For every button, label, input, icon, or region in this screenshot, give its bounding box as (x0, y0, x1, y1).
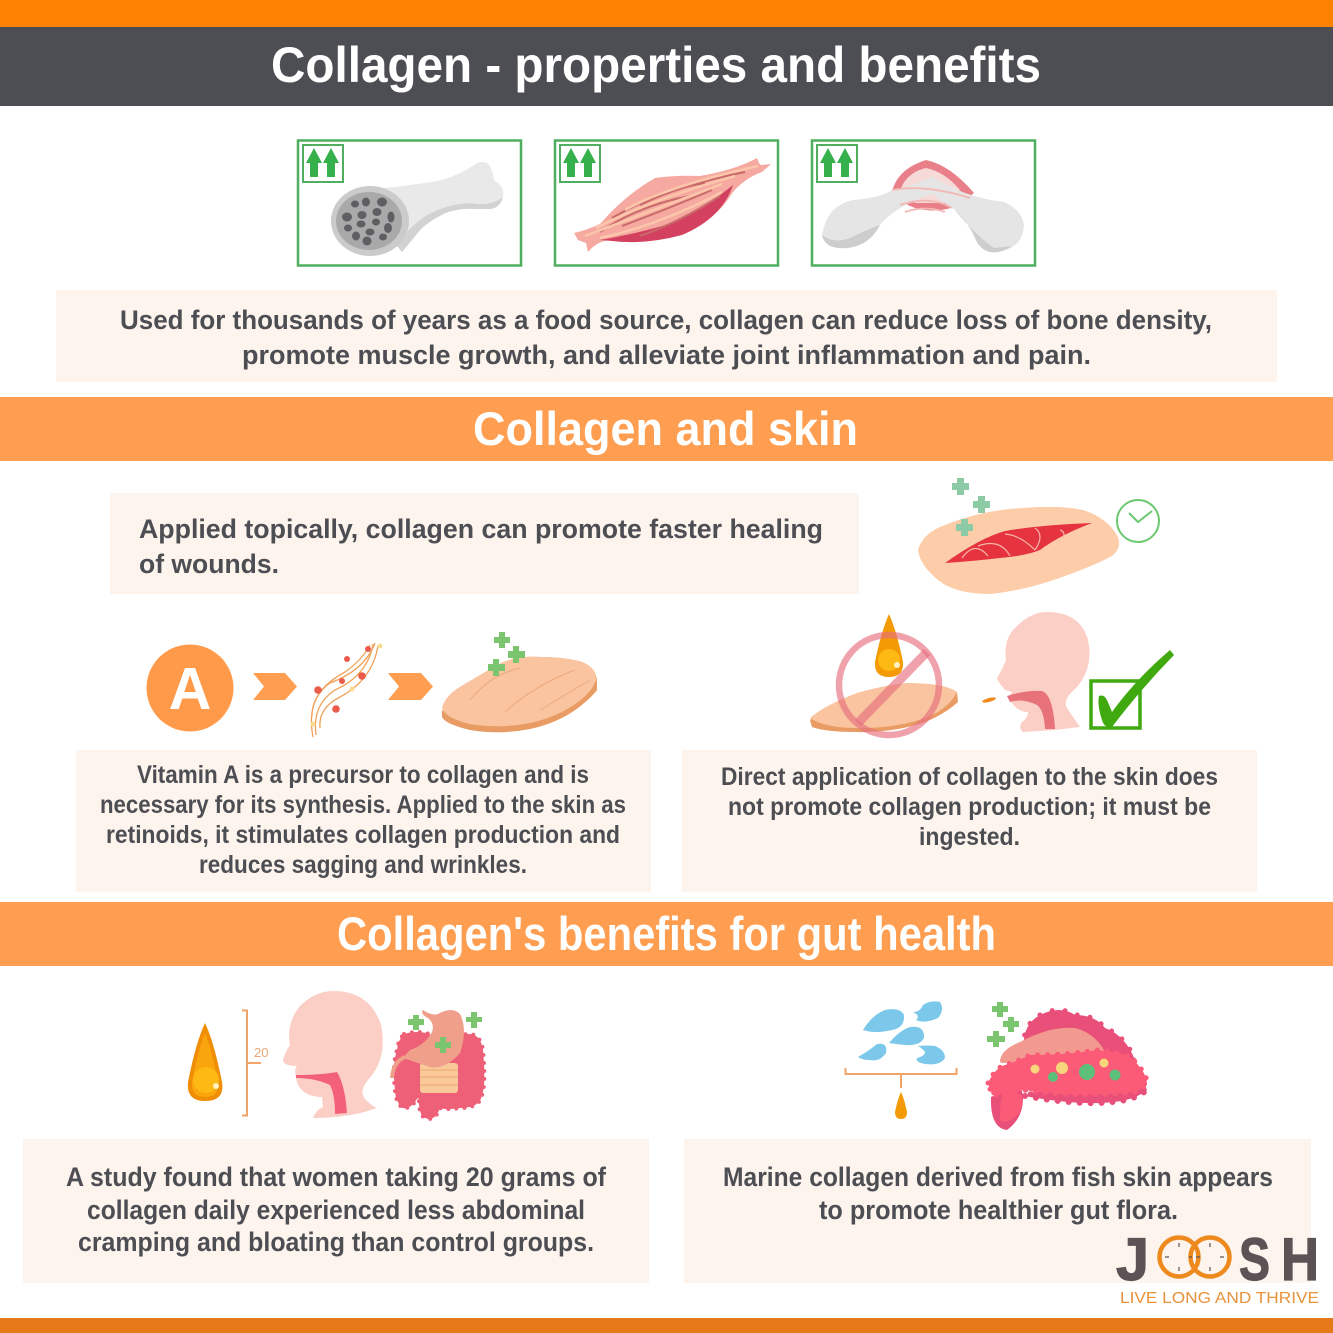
icon: 20 gram collagen drop: 20 (254, 1045, 268, 1060)
panel: intro text (56, 290, 1277, 382)
logo: JOOSH: LIVE LONG AND THRIVE (1120, 1290, 1319, 1307)
panel: direct application text: ingested. (919, 823, 1020, 851)
title banner: Collagen - properties and benefits (271, 37, 1041, 93)
icon: vitamin A circle (146, 644, 234, 732)
panel: wound healing text (110, 493, 859, 594)
logo: JOOSH: S (1239, 1226, 1270, 1293)
panel: joint icon (812, 140, 1035, 266)
icon: head ingesting collagen with check (982, 612, 1174, 732)
panel: vitamin A text: necessary for its synthesis. Applied to the skin as (100, 791, 626, 819)
heading: collagen and skin (0, 397, 1333, 461)
icon: fish skin to collagen (846, 1001, 956, 1119)
icon: wound with healing clock (918, 478, 1159, 594)
panel: direct application text (682, 750, 1257, 892)
panel: marine collagen text (684, 1139, 1311, 1283)
logo: JOOSH: H (1281, 1226, 1319, 1293)
panel: direct application text: Direct application of collagen to the skin does (721, 763, 1218, 791)
icon: 20 gram collagen drop (188, 1010, 268, 1116)
icon: topical drop prohibited (810, 614, 958, 735)
panel: study text: collagen daily experienced less abdominal (87, 1195, 585, 1225)
panel: intro text: Used for thousands of years as a food source, collagen can reduce loss of bone density, (120, 305, 1212, 335)
panel: vitamin A text: retinoids, it stimulates collagen production and (106, 821, 620, 849)
panel: vitamin A text (76, 750, 651, 892)
heading: collagen and skin: Collagen and skin (473, 402, 858, 455)
panel: intro text: promote muscle growth, and alleviate joint inflammation and pain. (242, 340, 1091, 370)
icon: head ingesting (283, 991, 383, 1118)
top orange bar (0, 0, 1333, 27)
panel: marine collagen text: to promote healthier gut flora. (819, 1195, 1178, 1225)
icon: digestive system (392, 1010, 484, 1119)
bottom orange bar (0, 1318, 1333, 1333)
heading: gut health: Collagen's benefits for gut health (337, 907, 996, 960)
panel: study text: cramping and bloating than control groups. (78, 1227, 594, 1257)
logo: JOOSH: J (1116, 1226, 1149, 1293)
icon: healthy gut flora (987, 1002, 1147, 1130)
icon: collagen fibres (310, 643, 382, 737)
panel: wound healing text: Applied topically, collagen can promote faster healing (139, 514, 823, 544)
panel: marine collagen text: Marine collagen derived from fish skin appears (723, 1162, 1273, 1192)
panel: muscle growth icon (555, 140, 778, 266)
panel: vitamin A text: Vitamin A is a precursor to collagen and is (137, 761, 589, 789)
logo: JOOSH (1116, 1226, 1319, 1307)
panel: bone density icon (298, 140, 521, 266)
panel: study text (23, 1139, 649, 1283)
panel: vitamin A text: reduces sagging and wrinkles. (199, 851, 527, 879)
arrow: chevron two (388, 673, 433, 700)
icon: vitamin A circle: A (169, 656, 211, 722)
arrow: chevron one (253, 673, 297, 700)
panel: direct application text: not promote collagen production; it must be (728, 793, 1211, 821)
panel: wound healing text: of wounds. (139, 549, 279, 579)
title banner (0, 27, 1333, 106)
icon: healthy skin patch (442, 632, 597, 732)
panel: study text: A study found that women taking 20 grams of (66, 1162, 607, 1192)
heading: gut health (0, 902, 1333, 966)
